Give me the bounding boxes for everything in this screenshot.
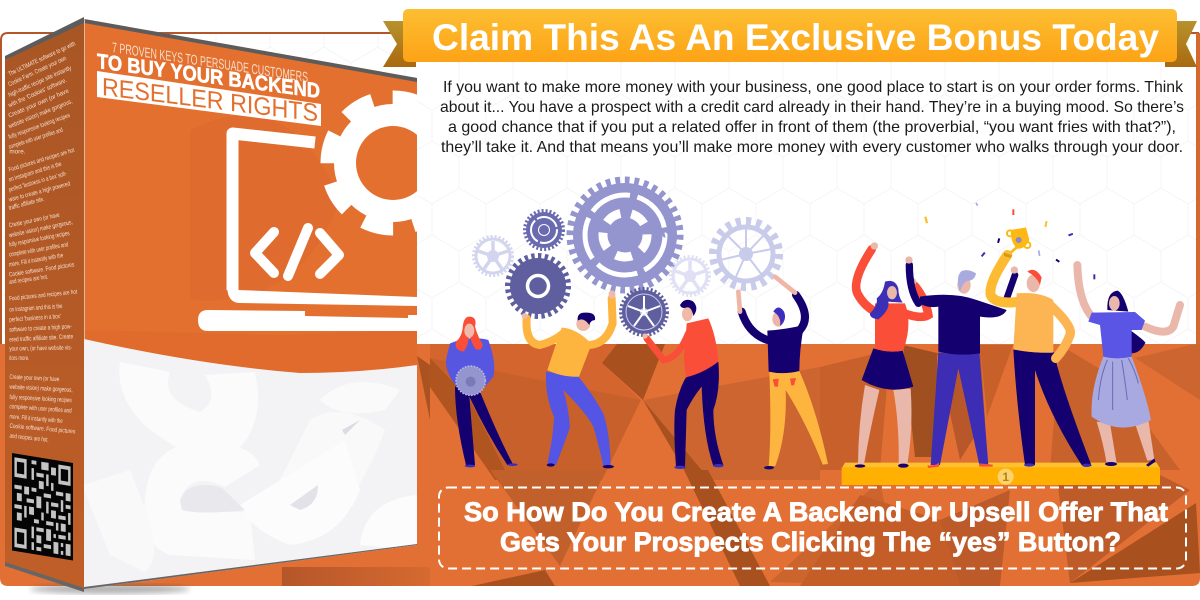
box front edge highlight [84,19,85,339]
side text: perfect 'business in a box' soft- [8,170,68,194]
person: man in navy with blue trousers [905,256,1007,468]
ribbon band [403,9,1177,62]
side text: ered traffic affiliate site. Create [9,333,74,344]
side text: Food pictures and recipes are hot [9,289,78,303]
box shadow [30,584,190,594]
side text: website vision) make gorgeous, [9,384,73,394]
intro paragraph: a good chance that if you put a related offer in front of them (the proverbial, “you want fries with that?”), [448,119,1176,136]
gear: dark [508,256,568,316]
ribbon header [383,9,1197,67]
person: man in yellow raising trophy [990,227,1092,467]
side text: fully responsive looking recipes [8,230,70,249]
confetti [924,202,1095,279]
intro paragraph: they’ll take it. And that means you’ll make more money with every customer who walks through your door. [441,139,1183,156]
product box [5,15,457,600]
icon: trophy [1004,227,1030,258]
side text: software to create a high pow- [9,323,72,334]
gear: small top [525,211,563,249]
panel: orange low-poly ground [0,344,1200,586]
side text: high-traffic recipe site instantly [7,64,73,99]
ribbon tail right [1165,21,1197,67]
box title text [97,39,321,128]
code symbol [255,228,339,276]
title: Claim This As An Exclusive Bonus Today [432,17,1159,58]
side text: with the 'Cookies' software. [7,77,68,109]
QR code [12,453,73,560]
side text: and recipes are hot. [9,274,49,286]
box bottom edge [84,544,417,592]
subtitle: 7 PROVEN KEYS TO PERSUADE CUSTOMERS [112,39,308,85]
side text: more. Fill it instantly with the [8,252,64,269]
gear: light right [713,221,779,287]
person: yellow sweater [522,291,615,468]
side text: perfect 'business in a box' [9,313,61,324]
side text: Cookie software. Food pictures [9,261,75,279]
box top edge [84,17,417,82]
side text: Cookie software. Food pictures [9,423,76,435]
intro paragraph: If you want to make more money with your business, one good place to start is on your order forms. Think [443,79,1184,96]
person: red shirt [642,300,724,469]
side text: The ULTIMATE software to go with [7,40,77,78]
side text: traffic affiliate site. [8,196,45,212]
callout: dashed question box [439,488,1186,568]
icon: gear [320,90,417,236]
reseller rights banner [97,71,321,126]
gear cluster [474,181,779,335]
side text: itors more. [9,355,29,362]
side text: and recipes are hot. [9,433,49,444]
podium: 1 [1002,470,1009,484]
side text: Create your own (or have [9,374,60,383]
intro paragraph: about it... You have a prospect with a credit card already in their hand. They’re in a buying mood. So there’s [440,99,1184,116]
icon: laptop [198,134,417,331]
gear: large [571,181,679,289]
people: celebrating on podium [842,202,1180,485]
side text: website vision) make gorgeous, [8,219,73,239]
side text: your own, (or have website vis- [9,345,72,353]
side text: fully responsive looking recipes [9,394,72,404]
side text: complete with user profiles and [8,127,64,151]
callout text: So How Do You Create A Backend Or Upsell Offer That [464,497,1168,527]
gear: faint [671,257,709,295]
side text: complete with user profiles and [9,403,72,415]
gear: lower right [621,289,667,335]
side text: on Instagram and this is the [9,303,63,314]
side text: Create your own (or have [7,87,70,120]
ribbon tail left [383,21,416,67]
headline: TO BUY YOUR BACKEND [97,50,320,103]
person: woman holding gear [446,317,518,467]
box side face [5,17,84,592]
panel: white card [1,33,1200,345]
reseller rights label: RESELLER RIGHTS [102,73,318,128]
gear: pale left [474,237,512,275]
side text: Food pictures and recipes are hot [8,147,75,174]
person: woman in red top [855,242,928,468]
podium [842,463,1160,485]
side text: fully responsive looking recipes [8,112,71,141]
side text: ware to create a high powered [7,180,71,204]
callout text [464,497,1168,557]
white background shapes [180,420,417,548]
side text: Cookie Farm. Create your own [7,55,68,88]
side text [7,40,78,444]
callout text: Gets Your Prospects Clicking The “yes” Button? [500,527,1121,557]
intro paragraph [440,79,1184,156]
box front face [84,19,417,589]
side text: on Instagram and this is the [8,161,63,184]
people: pushing gears [446,277,828,469]
person: navy sweater from behind [738,277,828,469]
side text: complete with user profiles and [8,241,69,259]
side text: Create your own (or have [8,212,61,229]
side text: more. [9,148,26,155]
side text: website vision) make gorgeous, [7,98,74,130]
person: woman in blue top and lilac skirt [1077,265,1180,467]
side text: more. Fill it instantly with the [9,413,63,425]
